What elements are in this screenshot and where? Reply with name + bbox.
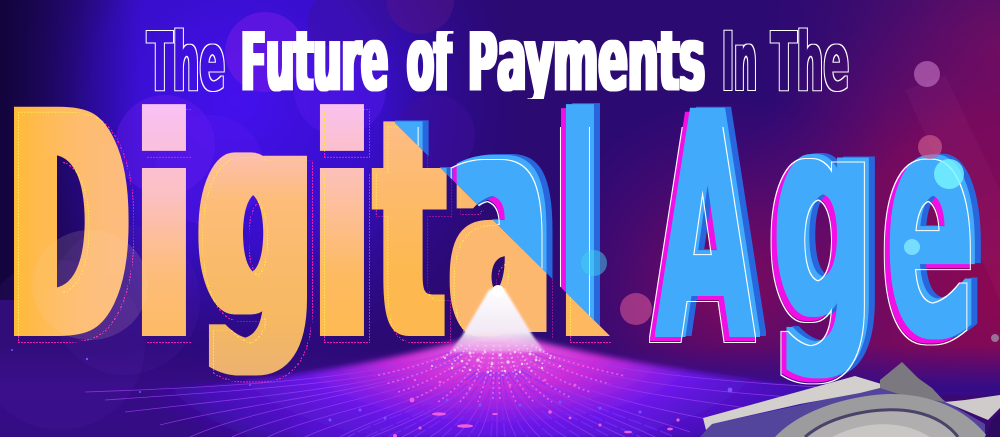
banknote portrait oval: [775, 394, 988, 437]
blue word Age: [657, 42, 978, 408]
infographic header scene: The: [771, 16, 849, 110]
blue letters tal behind the diagonal cut: a: [451, 44, 550, 403]
bokeh lights behind the title: [0, 0, 475, 430]
title words: Future of Payments: [242, 31, 705, 99]
orange word Digital: t: [378, 56, 442, 405]
title: In: [722, 16, 757, 110]
blue letters tal behind the diagonal cut: t: [378, 56, 442, 405]
title: The: [147, 16, 225, 110]
title: [146, 28, 849, 99]
orange word Digital: i: [314, 56, 369, 405]
particle stream: [85, 330, 880, 437]
banknote grey fold: [880, 362, 945, 402]
orange word Digital: a: [451, 44, 550, 403]
white cone of the particle stream: [450, 285, 545, 352]
orange word Digital: l: [560, 56, 615, 405]
banknote purple engraved border: [700, 386, 985, 437]
orange word Digital: i: [136, 56, 191, 405]
title words: Future of Payments: of: [407, 8, 452, 111]
foreground bokeh lights: [581, 61, 999, 342]
blue word Age: e: [887, 42, 978, 408]
orange word Digital: D: [9, 47, 128, 407]
blue letters tal behind the diagonal cut: [395, 103, 600, 326]
orange word Digital: g: [199, 51, 312, 380]
banknote cream corner: [945, 395, 1000, 420]
blue word Age: A: [657, 48, 758, 408]
title words: Future of Payments: Future: [241, 8, 388, 111]
banknote: [700, 362, 1000, 437]
title words: Future of Payments: Payments: [468, 8, 705, 111]
blue word Age: g: [773, 52, 878, 383]
sparkling particles: [11, 349, 732, 437]
orange word Digital: [14, 104, 611, 382]
pale glow on the letter D: [32, 230, 148, 340]
blue letters tal behind the diagonal cut: l: [568, 57, 592, 406]
banknote cream edge: [703, 376, 888, 430]
